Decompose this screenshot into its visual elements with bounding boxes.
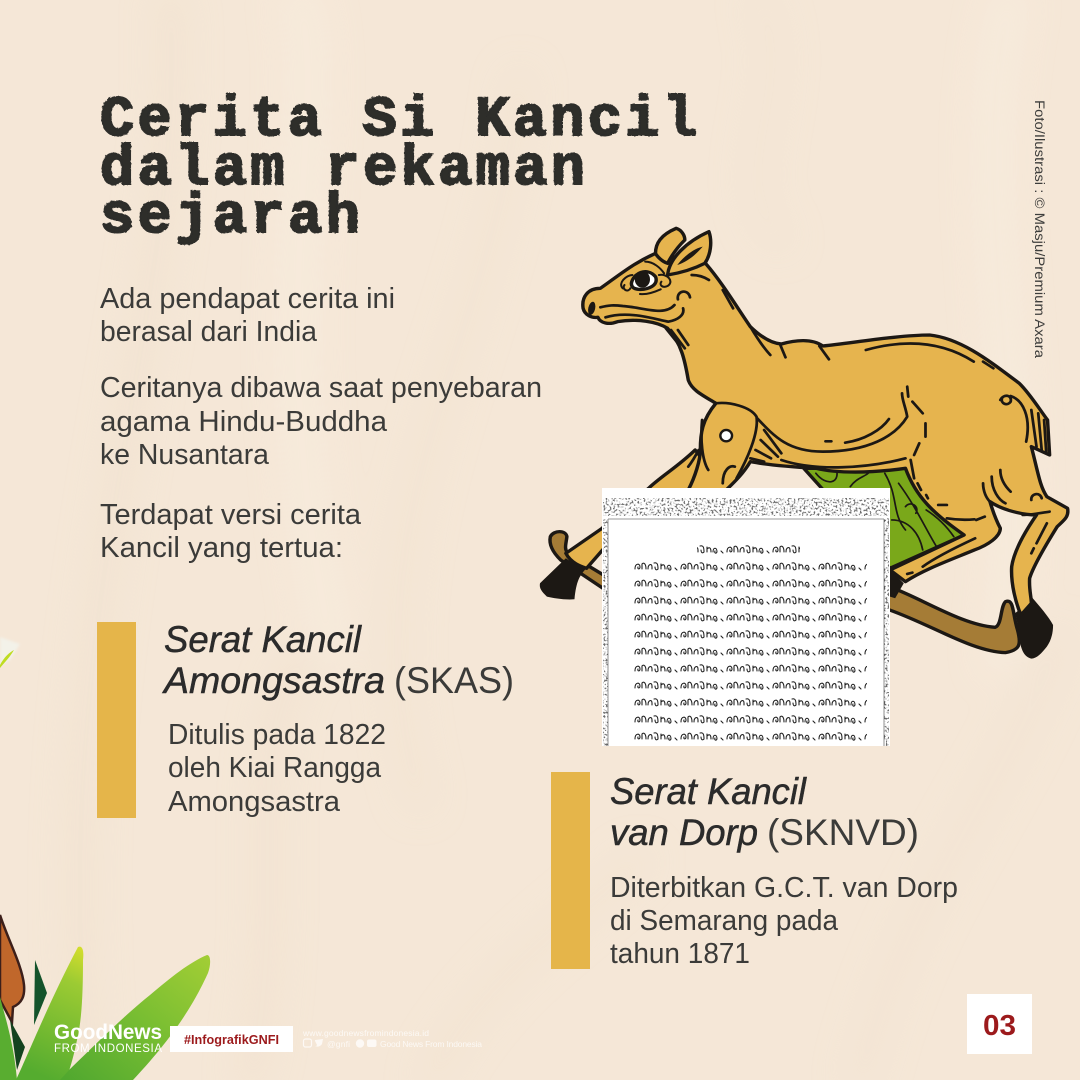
illustration: kancil wayang xyxy=(540,228,1068,659)
intro text: origin: berasal dari India xyxy=(100,316,318,348)
website and social handles: Good News From Indonesia xyxy=(380,1039,482,1049)
kancil body xyxy=(583,253,1068,615)
social icons xyxy=(304,1039,376,1048)
manuscript image xyxy=(602,488,890,746)
heading: SKAS xyxy=(162,619,514,701)
ornamental border xyxy=(603,498,889,746)
intro text: oldest version: Terdapat versi cerita xyxy=(100,499,362,531)
logo: GoodNews From Indonesia: FROM INDONESIA xyxy=(54,1043,162,1055)
green cloth xyxy=(804,468,964,568)
intro text: origin xyxy=(100,283,395,348)
intro text: spread: Ceritanya dibawa saat penyebaran xyxy=(100,372,542,404)
description: SKAS: Ditulis pada 1822 xyxy=(168,719,386,751)
description: SKNVD: tahun 1871 xyxy=(610,938,750,970)
accent bar xyxy=(97,622,136,818)
far hind hoof xyxy=(890,570,904,598)
plant illustration bottom left xyxy=(0,915,210,1080)
ears xyxy=(656,228,711,275)
heading: SKAS: Serat Kancil xyxy=(164,619,363,660)
page number: 03 xyxy=(983,1010,1016,1042)
description: SKAS: oleh Kiai Rangga xyxy=(168,752,382,784)
accent bar xyxy=(551,772,590,969)
heading: SKNVD: Serat Kancil xyxy=(610,771,808,812)
title xyxy=(100,89,697,250)
logo: GoodNews From Indonesia: GoodNews xyxy=(54,1021,162,1044)
panel: Serat Kancil Amongsastra xyxy=(97,619,514,818)
page number xyxy=(967,994,1032,1054)
heading: SKNVD: (SKNVD) xyxy=(767,812,919,853)
heading: SKAS: Amongsastra xyxy=(162,660,385,701)
intro text: oldest version xyxy=(100,499,362,564)
eye xyxy=(621,262,670,294)
intro text: origin: Ada pendapat cerita ini xyxy=(100,283,395,315)
body detail lines xyxy=(600,275,1050,574)
intro text: spread: ke Nusantara xyxy=(100,439,270,471)
far-right hoof xyxy=(1015,597,1053,659)
heading: SKAS: (SKAS) xyxy=(394,660,514,701)
description: SKAS xyxy=(168,719,386,818)
far front leg xyxy=(566,450,726,568)
website and social handles xyxy=(302,1028,482,1049)
intro text: oldest version: Kancil yang tertua: xyxy=(100,532,343,564)
description: SKNVD xyxy=(610,872,958,970)
intro text: spread: agama Hindu-Buddha xyxy=(100,406,388,438)
panel: Serat Kancil van Dorp xyxy=(551,771,958,970)
logo: GoodNews From Indonesia xyxy=(54,1021,162,1055)
website and social handles: @gnfi xyxy=(327,1039,350,1049)
description: SKNVD: Diterbitkan G.C.T. van Dorp xyxy=(610,872,958,904)
description: SKAS: Amongsastra xyxy=(168,786,341,818)
photo credit: Foto/Ilustrasi : © Masju/Premium Axara xyxy=(1032,100,1047,359)
small leaf at left edge xyxy=(0,637,20,668)
title: dalam rekaman xyxy=(100,138,585,202)
hashtag badge xyxy=(170,1026,293,1052)
description: SKNVD: di Semarang pada xyxy=(610,905,839,937)
left hoof xyxy=(540,558,587,599)
title: sejarah xyxy=(100,186,360,250)
intro text: spread xyxy=(100,372,542,471)
manuscript script lines xyxy=(634,543,867,742)
title: Cerita Si Kancil xyxy=(100,89,697,153)
brown stick right xyxy=(885,585,1019,653)
website and social handles: www.goodnewsfromindonesia.id xyxy=(302,1028,429,1038)
hashtag badge: #InfografikGNFI xyxy=(184,1032,279,1047)
heading: SKNVD: van Dorp xyxy=(610,812,758,853)
heading: SKNVD xyxy=(610,771,919,853)
brown stick left xyxy=(550,532,609,590)
joint hole xyxy=(720,430,732,441)
nostril xyxy=(587,301,597,316)
